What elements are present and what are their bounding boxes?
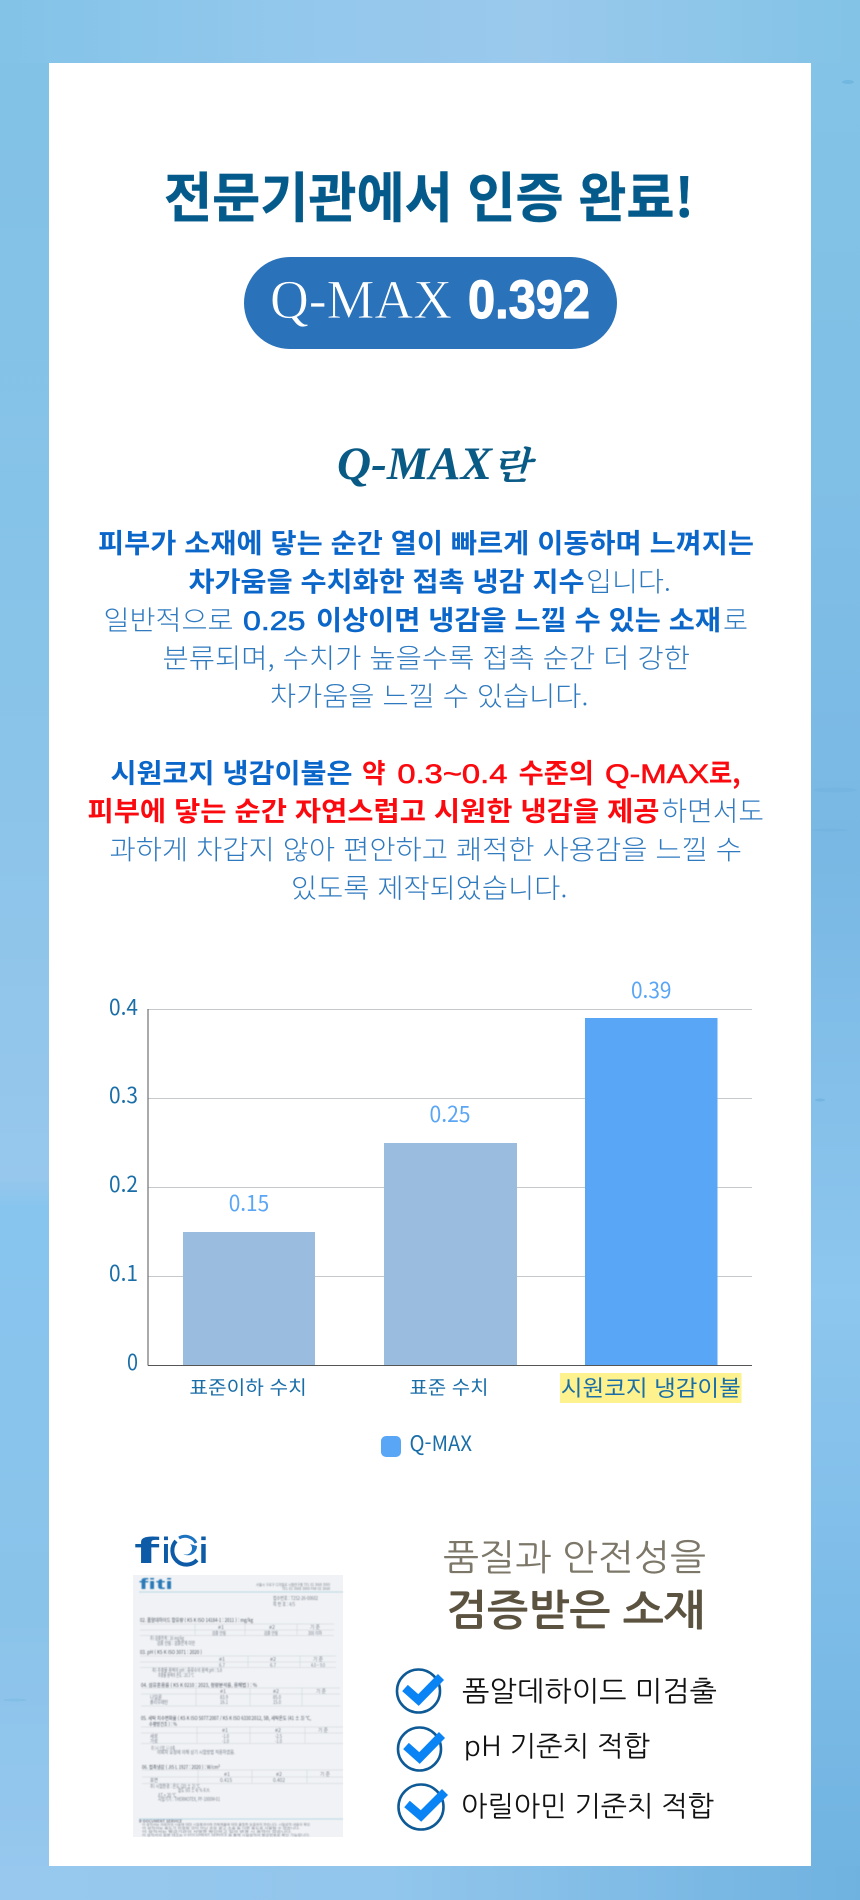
text block: product Q-MAX explanation: 있도록 제작되었습니다. (291, 867, 568, 906)
heading: Q-MAX란: 란 (493, 435, 536, 490)
y-axis labels: 0.2 (109, 1167, 138, 1199)
text block: Q-MAX definition (98, 522, 754, 714)
report sections: ΔT = 20 ℃ (158, 1792, 176, 1799)
text block: product Q-MAX explanation: 과하게 차갑지 않아 편안하고 쾌적한 사용감을 느낄 수 (110, 828, 742, 868)
report sections: 주) 추출물 용액의 pH : 증류수의 용액 pH : 5.8 (152, 1667, 222, 1674)
text block: product Q-MAX explanation: 로, (709, 752, 740, 791)
icon: check (398, 1728, 442, 1770)
report sections: 세로 (150, 1733, 158, 1740)
logo: FITI: f (134, 1530, 161, 1571)
text block: Q-MAX definition: 0.25 (243, 606, 306, 636)
report sections: 03. pH ( KS K ISO 3071 : 2020 ) (140, 1649, 202, 1656)
report sections: 시험기기 : THERMOTEX, PF-1000M-01 (158, 1796, 220, 1803)
text block: product Q-MAX explanation: Q-MAX (605, 759, 709, 789)
report sections (139, 1582, 343, 1837)
report sections: 15.0 (273, 1699, 281, 1706)
report sections: B-DOCUMENT SERVICE (139, 1818, 183, 1824)
report sections: -1.0 (222, 1733, 229, 1740)
heading: verified material (443, 1539, 706, 1632)
report sections: 이 성적서는 발급기관의 서명을 확인하고 임의 변경 시 효력이 없습니다. (142, 1828, 292, 1834)
report sections: #1 (219, 1656, 225, 1663)
text block: Q-MAX definition: 차가움을 수치화한 접촉 냉감 지수 (188, 560, 584, 600)
report sections: 6.7 (270, 1662, 276, 1669)
report sections: #2 (276, 1771, 282, 1778)
report sections: 이 성적서는 용도가 지정된 것이 아닌 홍보 광고 소송 등 다른 용도로 사용될 수 없습니다. (142, 1825, 300, 1830)
report sections: 표면 (150, 1777, 158, 1784)
bar: 표준 수치 (384, 1143, 517, 1365)
text block: Q-MAX definition: 차가움을 느낄 수 있습니다. (270, 675, 588, 714)
y-axis labels: 0.3 (109, 1078, 138, 1110)
title: 전문기관에서 인증 완료! (164, 154, 694, 233)
checklist item: formaldehyde (397, 1670, 717, 1712)
report sections: 04. 섬유혼용률 ( KS K 0210 : 2023, 정량분석률, 용해법 ) : % (141, 1682, 257, 1689)
report sections: 폴리우레탄 (150, 1699, 168, 1706)
report logo: fiti (139, 1576, 173, 1593)
legend: Q-MAX (410, 1428, 472, 1458)
report sections: 0.415 (220, 1777, 232, 1784)
report sections: #1 (224, 1771, 230, 1778)
report sections: 16.1 (220, 1699, 228, 1706)
heading: verified material: 검증받은 소재 (446, 1589, 705, 1632)
report sections: 습도 (65 ± 4) % R.H. (178, 1787, 210, 1794)
badge: Q-MAX 0.392: 0.392 (468, 270, 590, 330)
text block: Q-MAX definition: 입니다. (586, 560, 671, 600)
report sections: 기 준 (313, 1656, 323, 1663)
logo: FITI (134, 1530, 208, 1571)
checklist item: arylamine (398, 1784, 714, 1830)
report sections: #2 (270, 1656, 276, 1663)
report sections: 4.0 ~ 9.0 (311, 1662, 325, 1669)
value labels: 0.15 (229, 1186, 269, 1218)
logo: FITI: i (162, 1530, 170, 1571)
text block: product Q-MAX explanation: 피부에 닿는 순간 자연스럽고 시원한 냉감을 제공 (88, 790, 660, 829)
checklist item: formaldehyde: 폼알데하이드 미검출 (462, 1677, 717, 1706)
report sections: -1.0 (275, 1738, 282, 1745)
report sections: #1 (218, 1624, 224, 1631)
value labels: 0.39 (631, 973, 672, 1005)
report sections: 02. 폼알데하이드 함유량 ( KS K ISO 14184-1 : 2011 ) : mg/kg (140, 1617, 253, 1624)
report sections: 기 준 (310, 1624, 320, 1631)
text block: product Q-MAX explanation: 수준의 (519, 752, 594, 791)
icon: check (397, 1670, 441, 1712)
text block: product Q-MAX explanation: 시원코지 냉감이불은 (110, 752, 352, 791)
text block: product Q-MAX explanation: 하면서도 (662, 790, 764, 829)
bar chart: Q-MAX comparison (109, 973, 752, 1458)
report sections: 접수번호 : T252-26-00602 (273, 1595, 318, 1602)
checklist item: pH: pH 기준치 적합 (464, 1732, 650, 1761)
report sections: 추출물 용액의 온도 : 20.3 ℃ (158, 1672, 194, 1679)
y-axis labels (109, 990, 138, 1377)
y-axis labels: 0.4 (109, 990, 138, 1022)
y-axis labels: 0 (127, 1345, 138, 1377)
category labels: 시원코지 냉감이불 (561, 1371, 741, 1403)
value labels: 0.25 (430, 1097, 470, 1129)
report sections: 쪽 번 호 : 4/5 (273, 1601, 295, 1608)
report sections: 기 준 (318, 1727, 328, 1734)
icon: check (398, 1784, 445, 1830)
text block: product Q-MAX explanation: 0.3~0.4 (397, 759, 507, 789)
value labels (229, 973, 671, 1218)
heading: verified material: 품질과 안전성을 (443, 1539, 706, 1576)
report sections: 85.0 (273, 1694, 281, 1701)
report sections: 06. 접촉냉감 ( JIS L 1927 : 2020 ) : W/cm² (142, 1764, 220, 1771)
bar: 시원코지 냉감이불 (585, 1018, 718, 1365)
report sections: 검출 안됨 (212, 1630, 226, 1637)
category labels (189, 1371, 741, 1403)
badge: Q-MAX 0.392: Q-MAX (270, 269, 452, 330)
report sections: 주) 검출한계 : 16 mg/kg (150, 1635, 184, 1642)
report sections: 나일론 (150, 1694, 162, 1701)
report sections: 기 준 (316, 1688, 326, 1695)
report sections: 83.9 (220, 1694, 228, 1701)
y-axis labels: 0.1 (109, 1256, 138, 1288)
checklist item: pH (398, 1728, 650, 1770)
heading: Q-MAX란: Q-MAX (337, 438, 494, 490)
text block: Q-MAX definition: 분류되며, 수치가 높을수록 접촉 순간 더 강한 (162, 637, 690, 676)
category labels: 표준이하 수치 (189, 1373, 307, 1400)
report sections: 주) (+) 신장, (-) 수축 (151, 1745, 175, 1752)
text block: Q-MAX definition: 로 (723, 599, 748, 638)
report sections: #1 (220, 1688, 226, 1695)
bar: 표준이하 수치 (183, 1232, 315, 1365)
report sections: #2 (273, 1688, 279, 1695)
text block: Q-MAX definition: 일반적으로 (104, 599, 234, 638)
report sections: 주) 시험환경 : 온도 (20 ± 2) ℃ (150, 1783, 200, 1790)
report sections: TEL 02 3668 3000 FAX 02 3668 (282, 1587, 330, 1592)
text block: product Q-MAX explanation (88, 752, 764, 906)
report sections: 서울시 구로구 디지털로 시험연구원 TEL 02 3668 3000 (256, 1582, 330, 1588)
report sections: 6.7 (219, 1662, 225, 1669)
report sections: 검출 안됨 (264, 1630, 278, 1637)
category labels: 표준 수치 (410, 1373, 488, 1400)
legend (381, 1428, 472, 1458)
report sections: #2 (269, 1624, 275, 1631)
report sections: 이 성적서는 의뢰자의 시료에 대한 시험결과이며 전체제품에 대한 품질을 보증하지 않습니다. 시험성적 내용의 확인 (142, 1822, 310, 1826)
report sections: 의뢰자 요청에 의해 상기 시험방법 적용하였음. (157, 1749, 235, 1756)
report sections: -1.0 (222, 1738, 229, 1745)
report sections: 수평방건조 ) : % (149, 1721, 177, 1728)
report sections: 검출 안됨 : 검출한계 미만 (157, 1640, 195, 1647)
report sections: 300 이하 (308, 1630, 322, 1637)
logo: FITI: i (199, 1530, 208, 1571)
checklist item: arylamine: 아릴아민 기준치 적합 (461, 1792, 714, 1821)
badge: Q-MAX 0.392 (244, 257, 617, 349)
report sections: 가로 (150, 1738, 158, 1745)
report sections: -2.5 (275, 1733, 282, 1740)
text block: Q-MAX definition: 피부가 소재에 닿는 순간 열이 빠르게 이동하며 느껴지는 (98, 522, 754, 561)
report sections: 이 성적서의 원본 대조는 e-DOCUMENT SERVICE 를 통해 시험성적서 발급번호로 확인 가능합니다. (142, 1832, 310, 1837)
text block: product Q-MAX explanation: 약 (362, 752, 386, 791)
report sections: 05. 세탁 치수변화율 ( KS K ISO 5077:2007 / KS K ISO 6330:2012, 5B, 세탁온도 (41 ± 3) ℃, (141, 1715, 312, 1722)
test report document (133, 1575, 343, 1837)
report sections: #2 (275, 1727, 281, 1734)
text block: Q-MAX definition: 이상이면 냉감을 느낄 수 있는 소재 (316, 599, 721, 638)
report sections: 기 준 (320, 1771, 330, 1778)
report sections: #1 (222, 1727, 228, 1734)
report sections: 0.402 (273, 1777, 285, 1784)
